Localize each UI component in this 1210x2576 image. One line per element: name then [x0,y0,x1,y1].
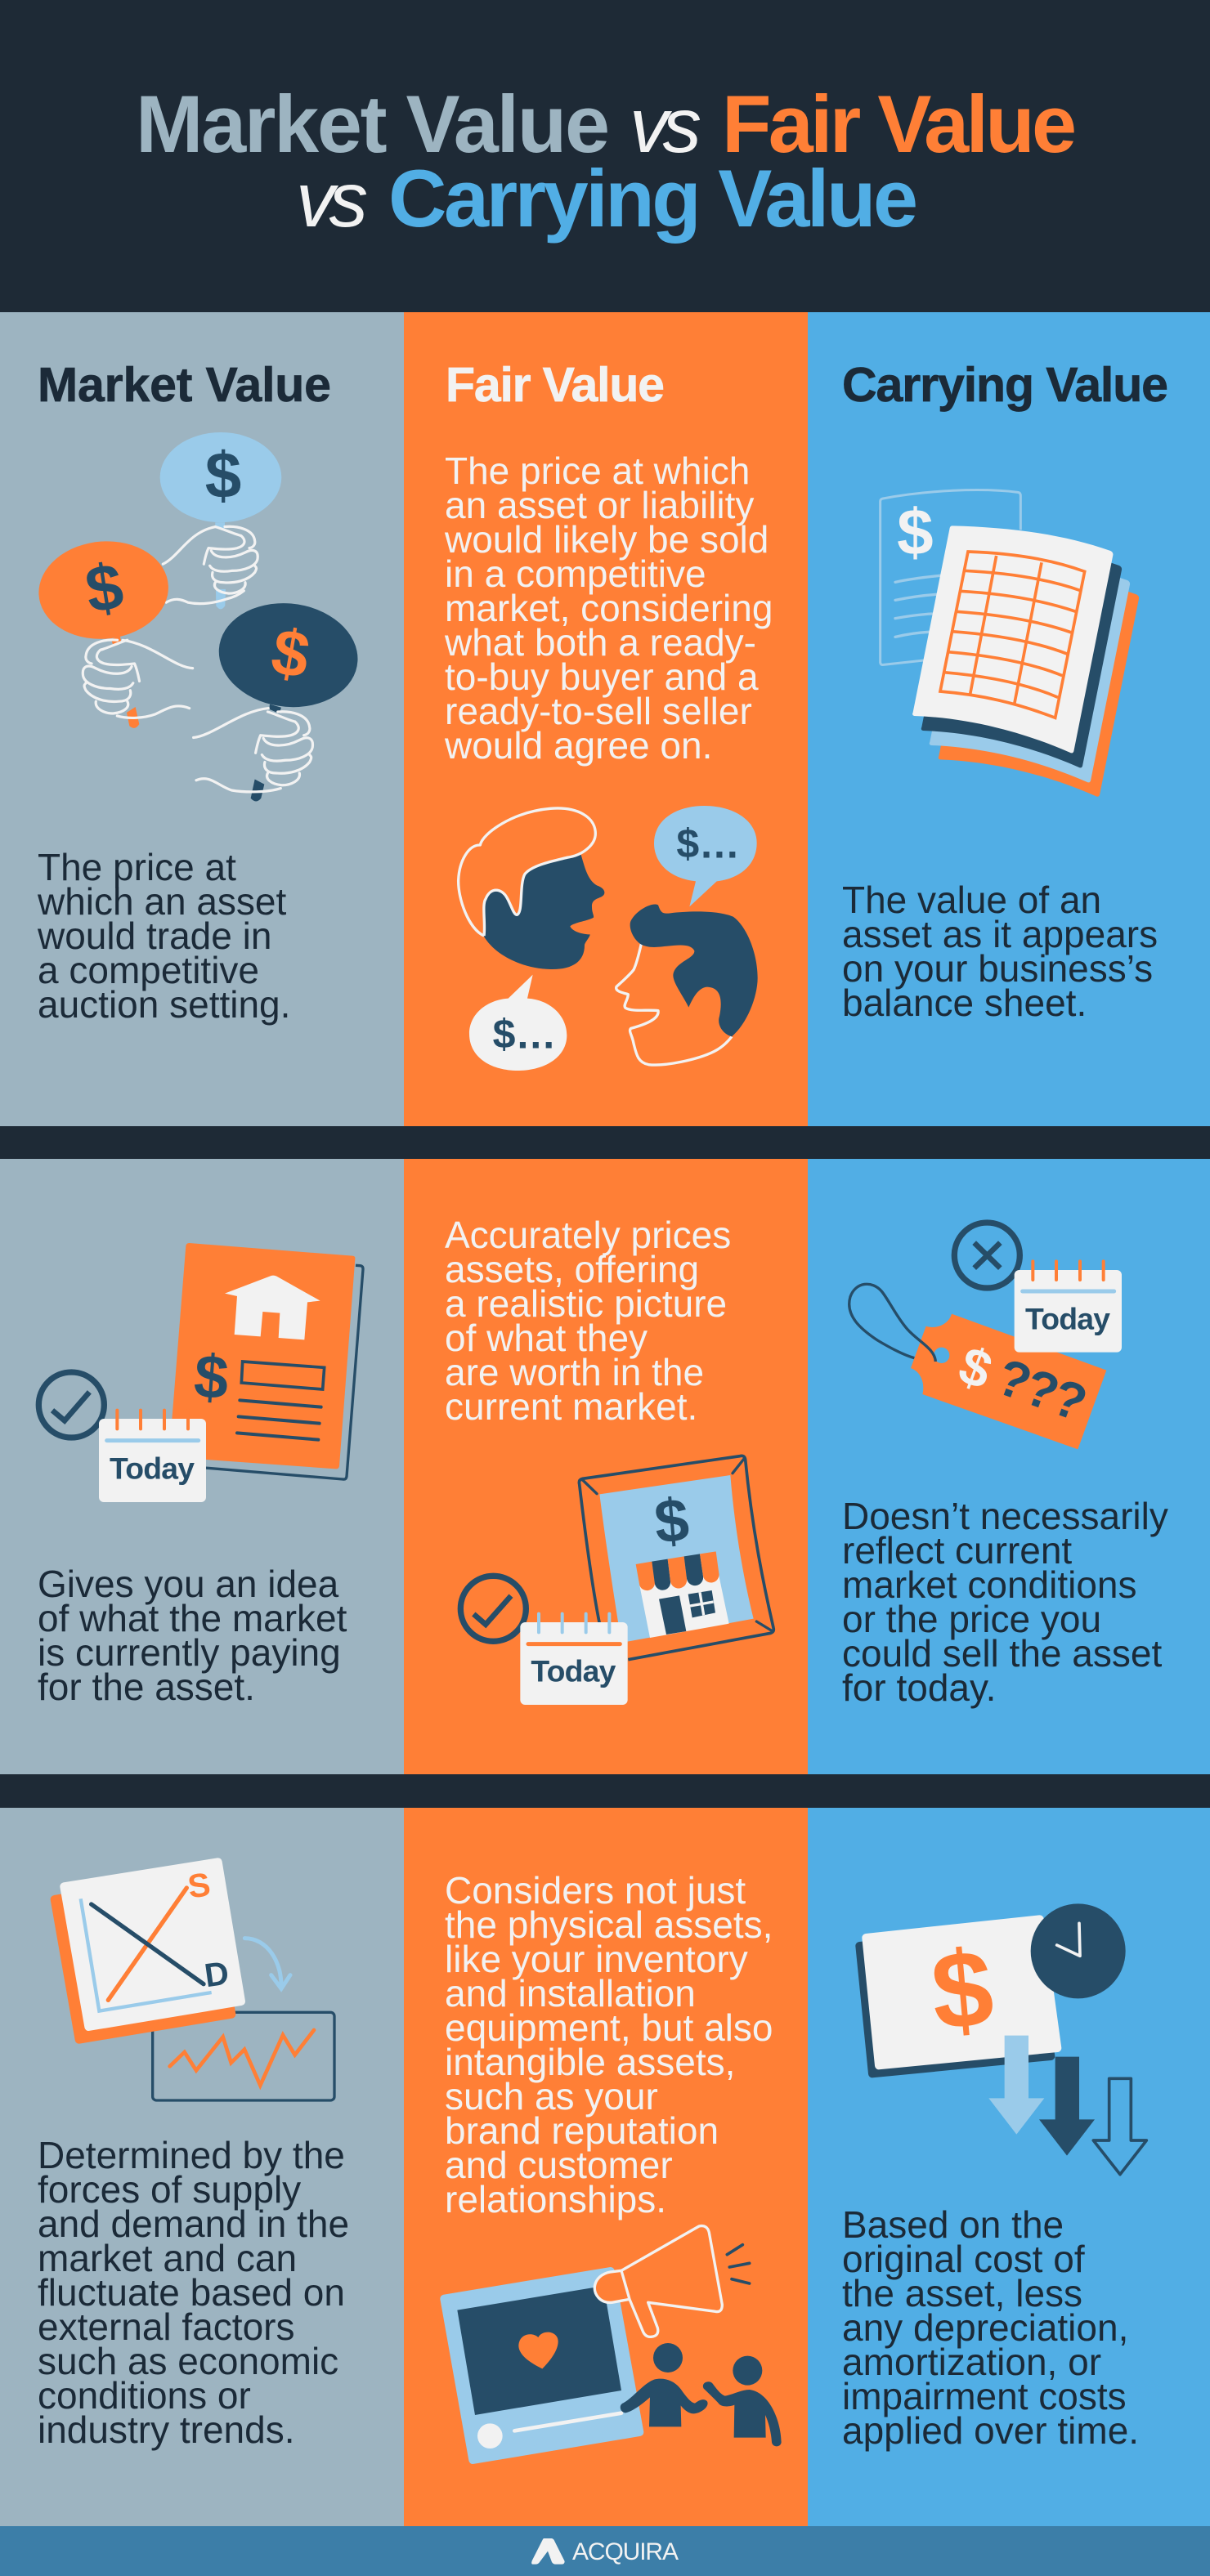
left face [459,808,604,969]
text: carrying value row three: Based on the [842,2203,1064,2246]
text: fair value definition: what both a ready- [444,621,756,664]
text: market value row two: of what the market [38,1597,347,1639]
text: fair value row three: brand reputation [445,2109,719,2152]
icon: balance sheet pages [881,490,1139,797]
text: carrying value row three: any depreciation, [842,2306,1128,2349]
blue paddle [160,432,281,609]
right face [616,904,758,1065]
calendar [1015,1261,1122,1353]
text: fair value row two: of what they [445,1317,648,1359]
heading: Carrying Value: Carrying Value [842,358,1168,412]
stacked pages [912,525,1139,797]
calendar [520,1614,628,1705]
text: fair value definition: would agree on. [444,724,712,767]
dollar bill: $ [927,1927,997,2054]
icon: depreciating bill with clock and down arrows [859,1903,1146,2175]
text: fair value definition: market, considering [445,587,773,629]
text: market value row three: Determined by the [38,2134,345,2176]
icon: price tag with question marks [849,1223,1122,1449]
text: fair value row two: a realistic picture [445,1282,727,1325]
logo: Acquira: ACQUIRA [572,2538,679,2565]
back document: $ [897,496,934,569]
text: fair value definition: in a competitive [445,552,706,595]
text: market value definition: The price at [38,846,236,888]
text: market value row three: market and can [38,2237,297,2279]
tablet [444,2271,639,2460]
check circle [38,1372,104,1438]
text: fair value definition: would likely be sold [444,518,769,561]
text: market value row three: fluctuate based on [38,2271,345,2314]
icon: tablet, megaphone and people [444,2226,782,2460]
text: market value row two: for the asset. [38,1666,255,1708]
text: carrying value definition: on your business’s [842,947,1153,990]
megaphone [594,2226,750,2337]
text: carrying value row three: applied over time. [842,2409,1139,2452]
curved arrow [244,1939,290,1988]
icon: storefront frame, check and calendar [460,1456,773,1705]
price tag: ??? [989,1348,1092,1432]
text: carrying value row two: or the price you [842,1598,1101,1640]
back outline [204,1265,363,1479]
text: fair value row two: Accurately prices [445,1214,731,1256]
dollar sign: navy paddle: $ [267,615,315,692]
text: market value definition: would trade in [37,915,271,957]
supply demand card: D [202,1954,231,1994]
text: fair value row three: relationships. [445,2178,666,2220]
icon: property document, check and calendar [38,1243,363,1502]
text: carrying value row three: impairment costs [842,2375,1127,2417]
text: fair value definition: ready-to-sell seller [445,690,752,732]
text: carrying value row three: amortization, or [842,2341,1101,2383]
dollar sign: blue paddle: $ [205,439,241,512]
text: market value definition: which an asset [37,880,286,923]
supply demand card [55,1862,241,2040]
supply demand card: S [186,1865,213,1906]
heading: Fair Value: Fair Value [446,358,665,412]
x circle [954,1223,1020,1288]
text: fair value row three: and installation [445,1972,696,2015]
icon: supply and demand chart [55,1862,334,2100]
dollar sign: orange paddle: $ [81,549,128,627]
divider bars [0,1126,1210,1808]
title: Carrying Value [388,153,918,244]
icon: hands raising dollar paddles [37,432,361,801]
text: carrying value definition: balance sheet. [842,982,1087,1024]
text: market value row three: forces of supply [38,2168,301,2211]
text: fair value row three: like your inventory [445,1938,748,1980]
text: fair value row two: assets, offering [445,1248,699,1290]
text: market value row two: Gives you an idea [38,1563,339,1605]
frame [579,1456,773,1660]
text: market value row two: is currently paying [38,1631,341,1674]
text: carrying value row two: market conditions [842,1563,1136,1606]
text: market value row three: external factors [38,2305,294,2348]
text: fair value row three: Considers not just [445,1869,746,1912]
icon: two people talking about price [459,806,758,1071]
text: fair value row three: the physical assets, [445,1903,773,1946]
person two [703,2356,782,2446]
title: vs [296,157,368,244]
text: carrying value row three: the asset, less [842,2272,1082,2314]
text: market value row three: such as economic [38,2340,338,2382]
storefront [636,1551,729,1638]
text: market value definition: auction setting. [38,983,290,1026]
header band [0,0,1210,312]
text: fair value row three: intangible assets, [445,2041,735,2083]
orange document: $ [192,1341,231,1412]
dollar bill [859,1919,1057,2073]
footer band [0,2526,1210,2576]
check circle [460,1576,526,1641]
text: market value row three: and demand in the [38,2203,349,2245]
price tag [849,1284,1106,1449]
text: carrying value row two: could sell the asset [842,1632,1162,1675]
table grid [940,552,1085,718]
white speech bubble: $... [493,1012,556,1058]
orange paddle [37,537,193,728]
text: carrying value definition: asset as it appears [842,913,1158,955]
calendar: Today [110,1451,195,1485]
text: fair value row three: such as your [445,2075,658,2118]
text: market value definition: a competitive [38,949,259,991]
text: carrying value row two: for today. [842,1666,996,1709]
trend chart [153,2012,334,2100]
text: fair value definition: to-buy buyer and a [445,655,759,698]
orange document [169,1243,355,1469]
text: fair value row three: and customer [445,2144,673,2186]
navy paddle [194,597,361,801]
price tag: $ [952,1335,1000,1401]
calendar [99,1411,206,1502]
text: carrying value row three: original cost of [842,2238,1085,2280]
title [136,78,1077,244]
light blue speech bubble: $... [676,821,740,866]
title: Market Value [136,78,610,169]
light blue speech bubble [654,806,757,906]
clock [1031,1903,1126,1998]
calendar: Today [1025,1302,1110,1336]
heading: Market Value: Market Value [38,358,331,412]
title: vs [630,83,701,169]
text: fair value definition: The price at which [445,449,750,492]
text: fair value definition: an asset or liability [445,484,754,526]
white speech bubble [469,975,567,1071]
text: fair value row two: current market. [445,1385,697,1428]
back document [881,490,1020,664]
frame: $ [652,1485,692,1556]
text: carrying value row two: reflect current [842,1529,1072,1572]
calendar: Today [531,1654,616,1688]
text: fair value row three: equipment, but also [445,2006,773,2049]
text: fair value row two: are worth in the [445,1351,704,1393]
title: Fair Value [722,78,1077,169]
down arrows [988,2036,1146,2175]
text: carrying value row two: Doesn’t necessarily [842,1495,1168,1537]
person one [621,2343,708,2426]
text: market value row three: industry trends. [38,2408,294,2451]
text: market value row three: conditions or [38,2374,251,2417]
text: carrying value definition: The value of an [842,879,1101,921]
